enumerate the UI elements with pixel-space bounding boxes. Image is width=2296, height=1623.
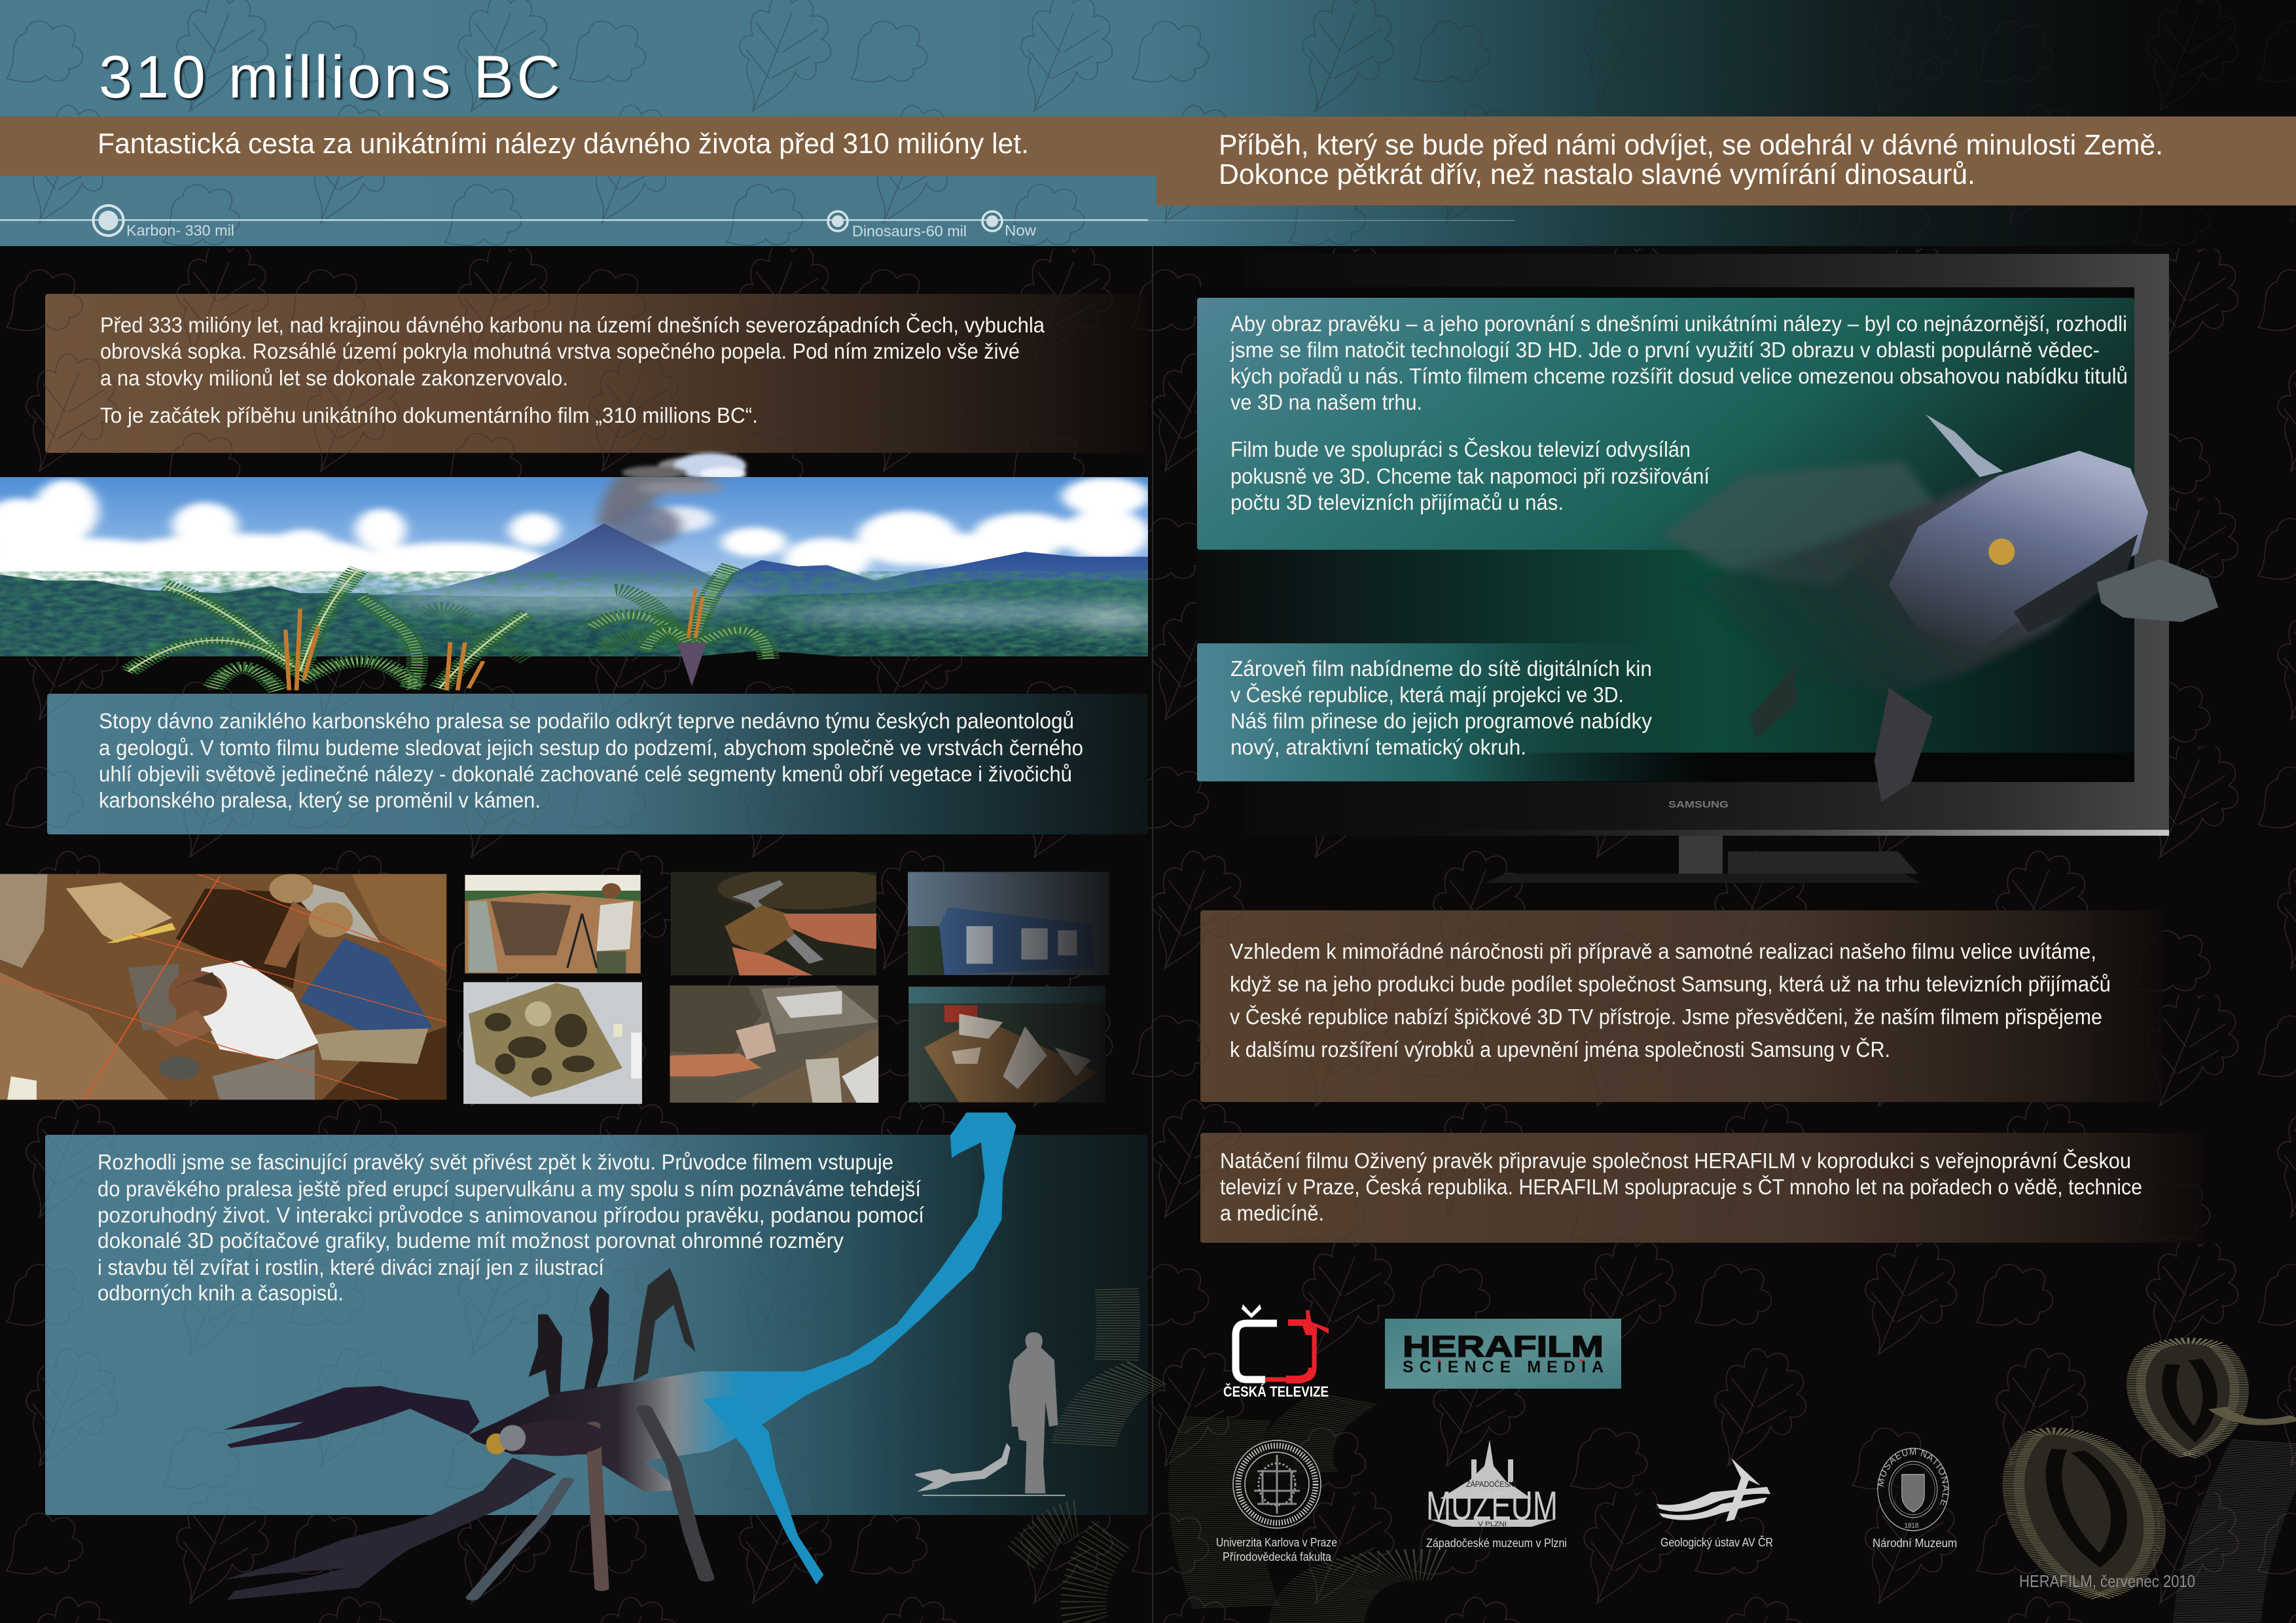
logo: National Museum seal: MUSAEUM NATIONALE [1877,1448,1949,1507]
logo: West Bohemian Museum: ZÁPADOČESKÉ [1466,1479,1518,1489]
photo gallery [0,868,1109,1104]
tv silver edge [1374,830,2169,836]
footer ferns left [1212,1399,1441,1623]
logo captions: Univerzita Karlova v Praze [1216,1536,1337,1549]
text: 3D technology: kých pořadů u nás. Tímto filmem chceme rozšířit dosud velice omezenou obsahovou nabídku titulů [1230,364,2128,388]
shell right [2136,1341,2296,1457]
floor line [922,1495,1066,1496]
text: animation paragraph [98,1150,924,1305]
text: Czech Television broadcast: pokusně ve 3D. Chceme tak napomoci při rozšiřování [1230,464,1710,488]
logo: National Museum seal: 1818 [1904,1522,1918,1530]
text: cinema [1230,656,1652,759]
panel: production text: a medicíně. [1220,1201,1324,1225]
logo captions [1216,1535,1957,1563]
fern [1084,1289,1148,1444]
timeline marker: Karbon: Karbon- 330 mil [126,222,234,239]
panel: production text: televizí v Praze, Česká republika. HERAFILM spolupracuje s ČT mnoho let na pořadech o vědě, technice [1220,1175,2142,1199]
subtitle left: Fantastická cesta za unikátními nálezy dávného života před 310 milióny let. [98,128,1029,160]
logo: West Bohemian Museum: V PLZNI [1478,1521,1507,1528]
text: animation paragraph: pozoruhodný život. V interakci průvodce s animovanou přírodou pravěku, podanou pomocí [98,1203,924,1227]
fern overlay [2217,1442,2276,1623]
fish: dorsal fin [1662,461,1936,585]
photo: table with finds [908,987,1105,1102]
text: animation paragraph: i stavbu těl zvířat i rostlin, které diváci znají jen z ilustrací [98,1255,604,1279]
panel: intro text [45,294,1148,453]
photo: tent [908,872,1109,975]
logo: Česká televize: ČESKÁ TELEVIZE [1223,1383,1329,1400]
text: animation paragraph: Rozhodli jsme se fascinující pravěký svět přivést zpět k životu. Průvodce filmem vstupuje [98,1150,893,1174]
text: cinema: Zároveň film nabídneme do sítě digitálních kin [1230,656,1652,681]
panel: Samsung text: Vzhledem k mimořádné náročnosti při přípravě a samotné realizaci našeho filmu velice uvítáme, [1230,939,2096,963]
header band: brown subtitle strips [0,116,2296,205]
panel: intro text: Před 333 milióny let, nad krajinou dávného karbonu na území dnešních severozápadních Čech, vybuchla [100,313,1045,337]
panel: Samsung text: když se na jeho produkci bude podílet společnost Samsung, která už na trhu televizních přijímačů [1230,972,2111,996]
panel: intro text: obrovská sopka. Rozsáhlé území pokryla mohutná vrstva sopečného popela. Pod ním zmizelo vše živé [100,339,1020,363]
logo: Herafilm: SCIENCE MEDIA [1403,1358,1604,1376]
human silhouette [1009,1332,1058,1493]
text: Czech Television broadcast: Film bude ve spolupráci s Českou televizí odvysílán [1230,437,1691,461]
fossil shells [2013,1341,2296,1623]
logo: Česká televize [1223,1304,1329,1400]
title: 310 millions BC [99,44,560,111]
logo: Geological Institute [1657,1458,1770,1522]
logo: Herafilm: HERAFILM [1403,1330,1604,1363]
bottom-left ferns [1021,1518,1113,1623]
text: cinema: nový, atraktivní tematický okruh. [1230,735,1526,759]
logo captions: Národní Muzeum [1873,1537,1957,1550]
logo: West Bohemian Museum: MUZEUM [1426,1484,1558,1529]
scorpion: blue rear leg [703,1396,823,1584]
timeline marker: Now: Now [1005,222,1036,239]
logo captions: Přírodovědecká fakulta [1223,1550,1332,1563]
scorpion: carapace highlight [505,1420,607,1456]
panel: cinema text background [1197,643,1708,781]
fish: lower fin [1874,688,1933,802]
panel: intro text: a na stovky milionů let se dokonale zakonzervovalo. [100,366,568,390]
scorpion: upper claw [223,1386,480,1448]
panel: Samsung text: k dalšímu rozšíření výrobků a upevnění jména společnosti Samsung v ČR. [1230,1037,1890,1061]
panel: 3D technology text [1197,298,2134,550]
panel: production text [1200,1133,2202,1243]
photo: hands with fossils [670,986,878,1103]
small scorpion silhouette [915,1443,1011,1491]
logo: Charles University seal [1233,1440,1321,1528]
scorpion: tail [703,1113,1016,1425]
scorpion: raised legs [529,1268,696,1396]
shell left [2013,1431,2155,1597]
photo: excavation [0,874,446,1100]
credit line: HERAFILM, červenec 2010 [2019,1571,2195,1591]
photo: surveyors [465,875,641,973]
panel: animation text [45,1135,1148,1515]
image: volcano panorama with ferns [0,453,1157,690]
panel: production text: Natáčení filmu Oživený pravěk připravuje společnost HERAFILM v koprodukci s veřejnoprávní Českou [1220,1149,2131,1173]
timeline [0,205,1515,240]
text: 3D technology [1230,312,2128,414]
fish: body [1684,476,2109,695]
subtitle right [1219,129,2163,190]
panel: intro text: To je začátek příběhu unikátního dokumentárního film „310 millions BC“. [100,403,758,427]
text: 3D technology: ve 3D na našem trhu. [1230,390,1422,414]
timeline marker: Karbon [93,205,234,239]
fish: left fin [1749,666,1798,739]
television [1197,254,2169,883]
text: animation paragraph: odborných knih a časopisů. [98,1281,344,1305]
scorpion model [223,1113,1148,1600]
panel: discovery text [47,694,1148,834]
tv brand: SAMSUNG [1668,799,1729,810]
logo captions: Geologický ústav AV ČR [1660,1535,1773,1549]
tv stand [1484,836,1920,883]
fish: head [1889,451,2148,651]
scorpion: thin legs [472,1409,706,1597]
timeline marker: Now [982,211,1036,239]
fish [1662,414,2218,802]
panel: discovery text: karbonského pralesa, který se proměnil v kámen. [99,788,541,812]
subtitle right: Dokonce pětkrát dřív, než nastalo slavné vymírání dinosaurů. [1219,158,1975,190]
panel: Samsung text [1200,910,2162,1102]
text: Czech Television broadcast [1230,437,1710,514]
panel: Samsung text: v České republice nabízí špičkové 3D TV přístroje. Jsme přesvědčeni, že naším filmem přispějeme [1230,1005,2102,1029]
palm ferns [128,565,769,690]
fish: jaw [2013,534,2138,632]
subtitle right: Příběh, který se bude před námi odvíjet, se odehrál v dávné minulosti Země. [1219,129,2163,161]
timeline marker: Dinosaurs: Dinosaurs-60 mil [852,223,967,240]
text: animation paragraph: dokonalé 3D počítačové grafiky, budeme mít možnost porovnat ohromné rozměry [98,1228,844,1253]
logo: West Bohemian Museum [1426,1440,1558,1529]
fish: pectoral fin [2097,559,2218,622]
text: cinema: Náš film přinese do jejich programové nabídky [1230,709,1652,733]
photo: hammer and rock [670,872,876,975]
fish: eye [1988,539,2015,565]
text: animation paragraph: do pravěkého pralesa ještě před erupcí supervulkánu a my spolu s ním poznáváme tehdejší [98,1177,921,1201]
scorpion: body [469,1371,805,1491]
cloud above panorama [622,453,746,480]
text: Czech Television broadcast: počtu 3D televizních přijímačů u nás. [1230,490,1564,514]
logo captions: Západočeské muzeum v Plzni [1426,1537,1567,1550]
text: cinema: v České republice, která mají projekci ve 3D. [1230,683,1624,707]
text: 3D technology: Aby obraz pravěku – a jeho porovnání s dnešními unikátními nálezy – byl co nejnázornější, rozhodli [1230,312,2127,336]
smoke plume [597,467,732,546]
header band: teal gradient [0,0,2296,246]
photo: fossil plate [463,982,642,1104]
panel: discovery text: uhlí objevili světově jedinečné nálezy - dokonalé zachované celé segmenty kmenů obří vegetace i živočichů [99,762,1072,786]
panel: discovery text: a geologů. V tomto filmu budeme sledovat jejich sestup do podzemí, abychom společně ve vrstvách černého [99,736,1083,760]
text: 3D technology: jsme se film natočit technologií 3D HD. Jde o první využití 3D obrazu v oblasti populárně vědec- [1230,338,2100,362]
centre divider [1152,246,1153,1623]
fish: spine [1926,414,2003,477]
screen glow [1197,298,2134,753]
scorpion: lower claw [223,1457,556,1600]
logo: Herafilm [1385,1319,1621,1389]
panel: discovery text: Stopy dávno zaniklého karbonského pralesa se podařilo odkrýt teprve nedávno týmu českých paleontologů [99,709,1074,733]
timeline marker: Dinosaurs [828,211,967,240]
